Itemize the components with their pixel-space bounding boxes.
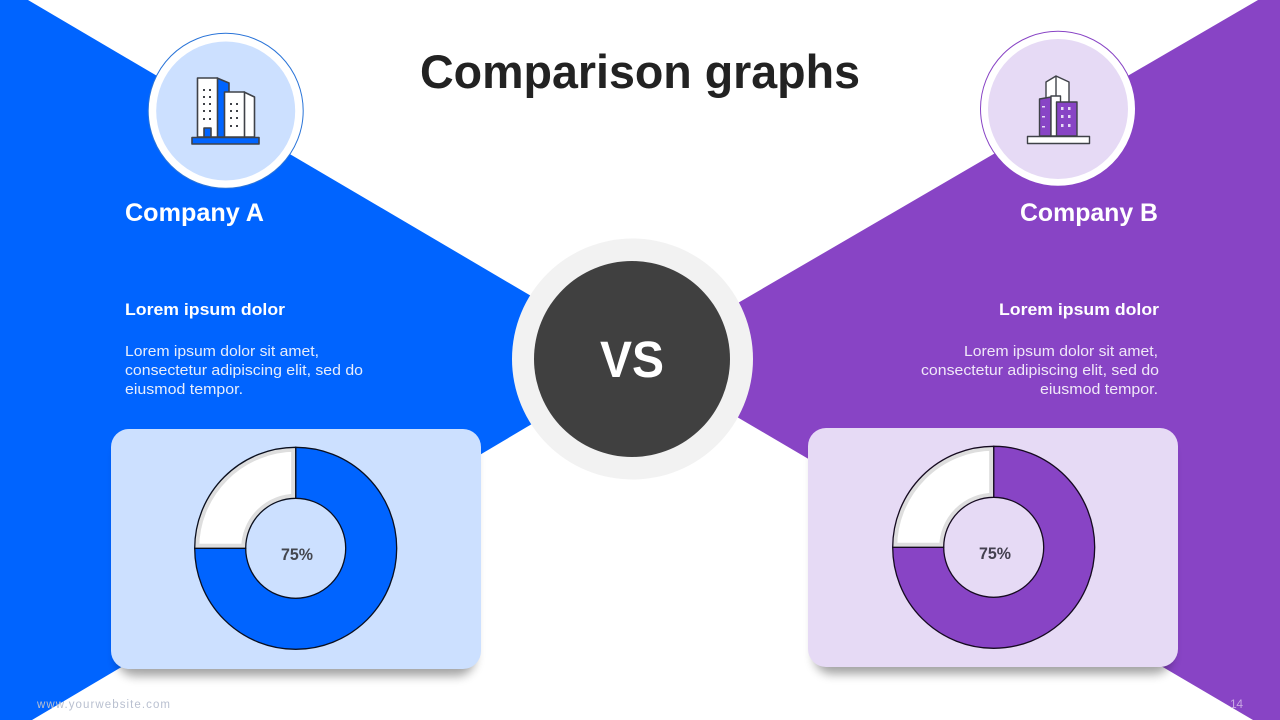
text block: Company B description: eiusmod tempor. (1040, 381, 1158, 398)
label: 75% A: 75% (281, 545, 313, 564)
heading: Company B: Company B (1020, 199, 1158, 227)
title: Comparison graphs (420, 45, 860, 98)
heading: Company A: Company A (125, 199, 264, 227)
icon: Company B badge (980, 31, 1136, 186)
VS badge: VS (600, 331, 664, 388)
panel: Company B chart card (808, 428, 1178, 674)
donut chart: Company B 75% (893, 446, 1095, 648)
text block: Company A description: Lorem ipsum dolor sit amet, (125, 343, 319, 360)
text block: Company B description: Lorem ipsum dolor sit amet, (964, 343, 1158, 360)
donut chart: Company A 75% (195, 447, 397, 649)
panel: blue background wedge (0, 0, 640, 720)
text block: Company A description: Lorem ipsum dolor (125, 300, 285, 319)
text block: Company B description: Lorem ipsum dolor (999, 300, 1159, 319)
footer: website: www.yourwebsite.com (36, 699, 170, 711)
panel: Company A chart card (111, 429, 481, 676)
text block: Company B description: consectetur adipiscing elit, sed do (921, 362, 1159, 379)
label: 75% B: 75% (979, 544, 1011, 563)
VS badge (512, 238, 753, 480)
panel: purple background wedge (640, 0, 1280, 720)
text block: Company A description: consectetur adipiscing elit, sed do (125, 362, 363, 379)
icon: Company A badge (148, 33, 303, 188)
text block: Company A description (125, 300, 363, 398)
text block: Company B description (921, 300, 1159, 398)
footer: page number: 14 (1230, 697, 1243, 711)
icon: Company B buildings (1028, 76, 1090, 144)
icon: Company A buildings (192, 78, 259, 144)
text block: Company A description: eiusmod tempor. (125, 381, 243, 398)
